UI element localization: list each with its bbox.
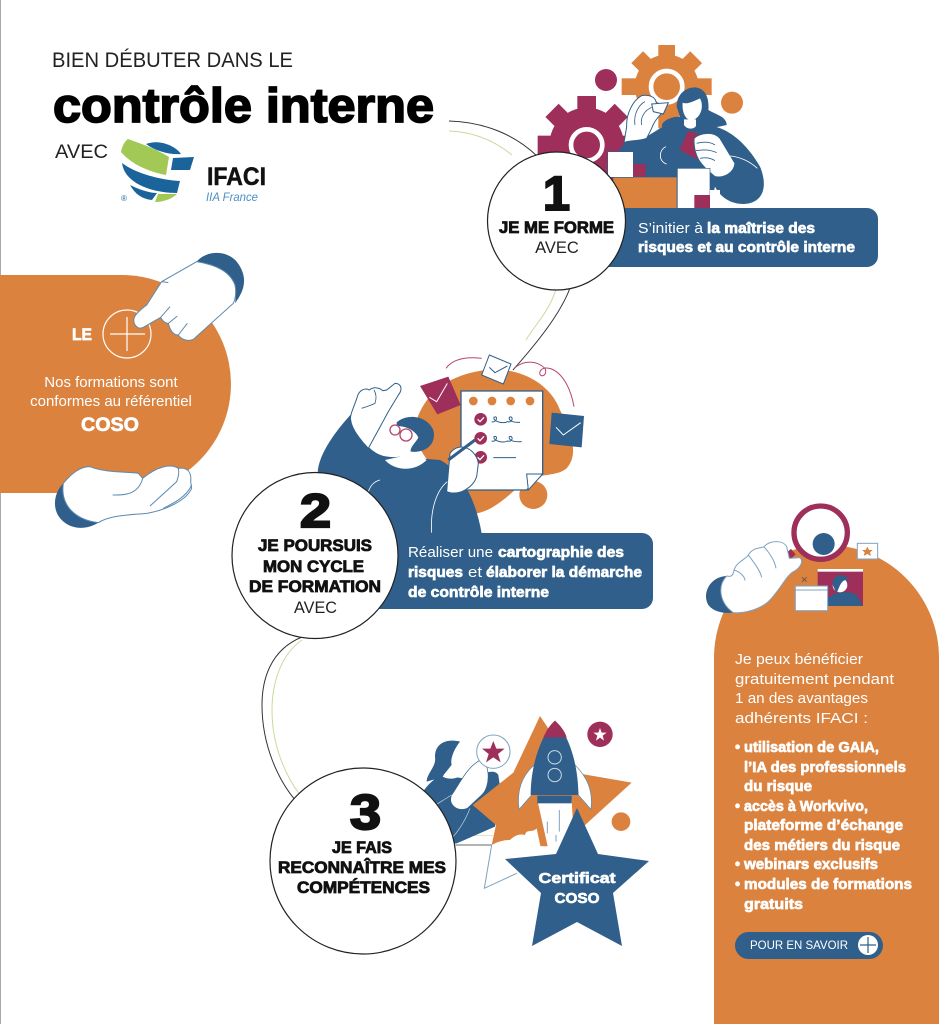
- LE label: LE: [72, 325, 92, 344]
- icon: open hand: [55, 466, 192, 528]
- boxes: [613, 177, 677, 208]
- IFACI logo: IFACI: [207, 163, 266, 191]
- callout bar 2: [350, 533, 653, 609]
- step 2 circle: AVEC: [294, 599, 337, 617]
- step 3 circle: JE FAIS: [332, 839, 392, 857]
- step 2 circle: [232, 472, 398, 638]
- benefits list: du risque: [744, 779, 812, 795]
- step 2 description: élaborer la démarche: [486, 565, 642, 581]
- benefits intro text: 1 an des avantages: [735, 691, 868, 707]
- COSO text block: conformes au référentiel: [30, 393, 192, 410]
- step 2 circle: 2: [300, 484, 331, 537]
- benefits list: plateforme d’échange: [744, 818, 903, 834]
- benefits intro text: gratuitement pendant: [735, 672, 894, 688]
- title: contrôle interne: [53, 80, 434, 133]
- benefits list: accès à Workvivo,: [744, 799, 868, 815]
- step 2 circle: JE POURSUIS: [258, 537, 372, 555]
- step 3 circle: COMPÉTENCES: [297, 878, 430, 897]
- certificate star: Certificat: [538, 870, 616, 887]
- benefits list: •: [735, 857, 740, 873]
- IFACI logo: IIA France: [206, 192, 258, 204]
- certificate star: [505, 808, 649, 946]
- title: BIEN DÉBUTER DANS LE: [52, 49, 293, 72]
- step 1 circle: [488, 152, 626, 290]
- rocket: [518, 721, 591, 809]
- woman body: [410, 772, 500, 845]
- hand and star bubble: [451, 759, 488, 809]
- step 2 description: et: [468, 565, 482, 581]
- illustration: woman with checklist: [318, 355, 584, 533]
- icon: plus circle: [103, 310, 151, 358]
- step 2 circle: MON CYCLE: [263, 558, 364, 576]
- benefits list: gratuits: [744, 897, 803, 913]
- COSO text block: [30, 374, 192, 436]
- icon: pointing hand: [134, 253, 244, 340]
- step 1 description: S’initier à: [638, 221, 704, 237]
- step 1 circle: AVEC: [535, 239, 579, 257]
- benefits intro text: Je peux bénéficier: [735, 652, 863, 668]
- benefits list: •: [735, 799, 740, 815]
- woman: [617, 125, 764, 208]
- step 1 circle: 1: [543, 168, 570, 221]
- benefits list: l’IA des professionnels: [744, 760, 906, 776]
- panel: COSO reference: [0, 275, 231, 493]
- step 3 circle: 3: [350, 786, 381, 840]
- AVEC label: AVEC: [55, 142, 108, 163]
- step 2 description: risques: [408, 565, 463, 581]
- panel: member benefits: [714, 545, 939, 1024]
- benefits list: •: [735, 740, 740, 756]
- illustration: gears and woman: [538, 45, 764, 208]
- benefits list: utilisation de GAIA,: [744, 740, 879, 756]
- step 1 description: [638, 221, 855, 256]
- benefits intro text: [735, 652, 894, 727]
- IFACI logo: ®: [121, 194, 127, 203]
- step 2 description: [408, 545, 642, 601]
- COSO text block: COSO: [81, 415, 139, 436]
- benefits list: des métiers du risque: [744, 838, 900, 854]
- button: learn more: [735, 932, 883, 959]
- IFACI logo: [121, 139, 266, 204]
- orange gear: [622, 45, 712, 128]
- step 1 description: la maîtrise des: [707, 221, 815, 237]
- step 2 circle: DE FORMATION: [249, 578, 381, 596]
- step 1 circle: JE ME FORME: [499, 219, 614, 237]
- certificate star: COSO: [554, 890, 600, 907]
- benefits list: modules de formations: [744, 877, 912, 893]
- COSO text block: Nos formations sont: [44, 374, 179, 391]
- checklist: [461, 391, 543, 490]
- benefits list: webinars exclusifs: [743, 857, 878, 873]
- button: learn more: POUR EN SAVOIR: [750, 938, 848, 952]
- step 3 circle: [270, 768, 456, 954]
- benefits list: [735, 740, 912, 913]
- title: [52, 49, 434, 133]
- step 2 description: cartographie des: [498, 545, 624, 561]
- benefits intro text: adhérents IFACI :: [735, 711, 868, 727]
- step 2 description: de contrôle interne: [408, 585, 549, 601]
- step 2 description: Réaliser une: [408, 545, 493, 561]
- step 1 description: risques et au contrôle interne: [638, 240, 855, 256]
- magenta gear: [538, 96, 636, 194]
- step 3 circle: RECONNAÎTRE MES: [278, 858, 446, 877]
- benefits list: •: [735, 877, 740, 893]
- illustration: rocket and woman: [410, 716, 632, 888]
- woman: [318, 412, 482, 533]
- connecting path: [262, 121, 570, 801]
- illustration: magnifier: [706, 506, 878, 613]
- callout bar 1: [590, 208, 878, 267]
